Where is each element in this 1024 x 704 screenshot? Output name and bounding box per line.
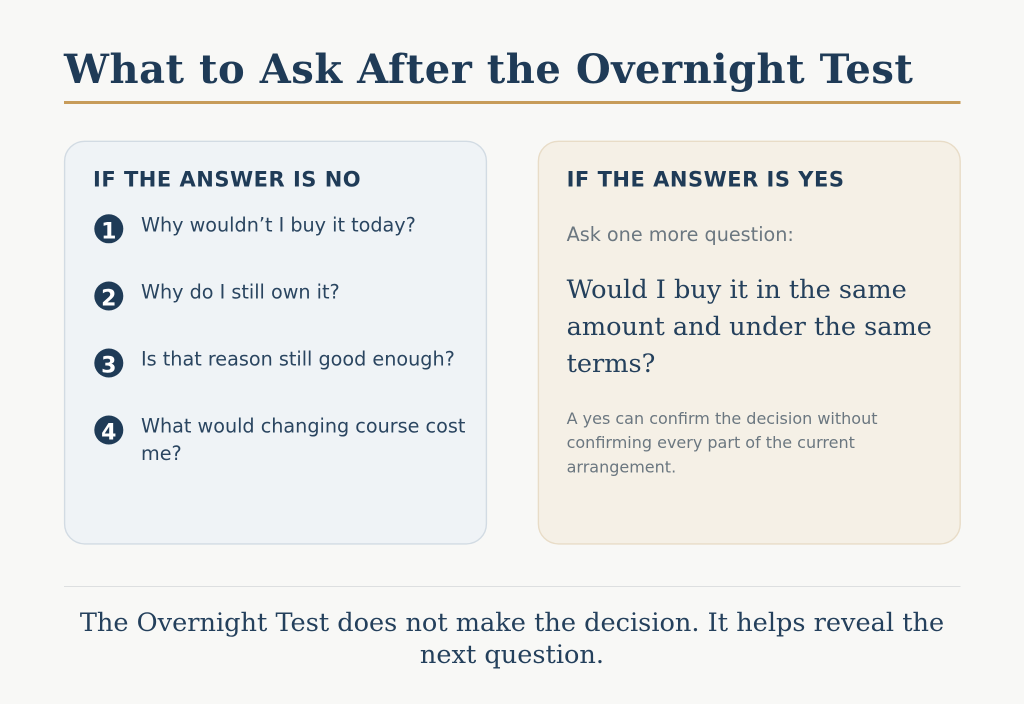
item 4: 4: [101, 420, 116, 446]
key question: Would I buy it in the same: [567, 275, 907, 305]
heading: yes: IF THE ANSWER IS YES: [567, 168, 845, 192]
title: What to Ask After the Overnight Test: [63, 46, 913, 93]
item 2: Why do I still own it?: [141, 280, 340, 304]
item 4: What would changing course cost: [141, 414, 466, 438]
panel: if the answer is no: [65, 141, 486, 544]
item 3: [94, 348, 455, 378]
heading: no: IF THE ANSWER IS NO: [93, 168, 361, 192]
note: arrangement.: [567, 458, 676, 476]
note: confirming every part of the current: [567, 433, 855, 452]
item 4: me?: [141, 442, 182, 465]
item 2: 2: [101, 286, 116, 312]
item 1: Why wouldn’t I buy it today?: [141, 214, 416, 236]
key question: amount and under the same: [567, 312, 932, 342]
title underline: [64, 101, 960, 104]
footer divider: [64, 586, 960, 587]
item 1: 1: [101, 220, 116, 244]
item 3: 3: [101, 354, 116, 378]
key question: terms?: [567, 349, 655, 379]
prompt: Ask one more question:: [567, 223, 794, 246]
item 4: [94, 414, 466, 465]
footer statement: next question.: [420, 640, 604, 670]
item 2: [94, 280, 340, 312]
panel: if the answer is yes: [538, 141, 960, 544]
item 1: [94, 214, 416, 244]
footer statement: The Overnight Test does not make the decision. It helps reveal the: [80, 608, 944, 638]
note: A yes can confirm the decision without: [567, 409, 878, 428]
item 3: Is that reason still good enough?: [141, 348, 455, 370]
